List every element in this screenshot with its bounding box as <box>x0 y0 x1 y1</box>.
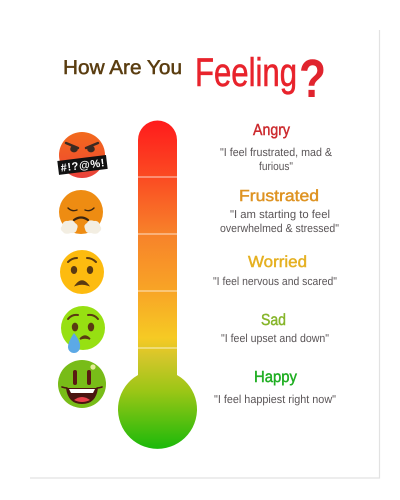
text block: frustrated: overwhelmed & stressed" <box>220 223 339 235</box>
icon: angry face <box>57 132 108 178</box>
text block: happy: "I feel happiest right now" <box>214 394 336 406</box>
text block: sad: "I feel upset and down" <box>221 333 329 345</box>
poster edge <box>30 30 380 478</box>
icon: angry face: #!?@%! <box>60 157 105 175</box>
title: feeling: Feeling <box>195 51 297 95</box>
text block: happy: Happy <box>254 369 297 386</box>
text block: angry: "I feel frustrated, mad & <box>220 147 332 159</box>
text block: worried <box>213 254 337 288</box>
text block: angry: furious" <box>259 161 293 173</box>
title: how are you: How Are You <box>63 57 182 79</box>
icon: frustrated face <box>59 190 103 234</box>
text block: angry <box>220 122 332 173</box>
text block: happy <box>214 369 336 406</box>
thermometer <box>118 120 197 449</box>
title <box>63 49 326 109</box>
text block: frustrated: "I am starting to feel <box>230 209 330 221</box>
icon: happy face <box>58 360 106 408</box>
icon: worried face <box>60 250 104 294</box>
text block: worried: Worried <box>248 254 307 271</box>
text block: sad <box>221 312 329 345</box>
text block: worried: "I feel nervous and scared" <box>213 276 337 288</box>
text block: frustrated <box>220 188 339 235</box>
text block: angry: Angry <box>253 122 290 139</box>
text block: frustrated: Frustrated <box>239 188 319 205</box>
title: question mark: ? <box>299 49 326 109</box>
text block: sad: Sad <box>261 312 286 329</box>
icon: sad face <box>61 306 105 353</box>
